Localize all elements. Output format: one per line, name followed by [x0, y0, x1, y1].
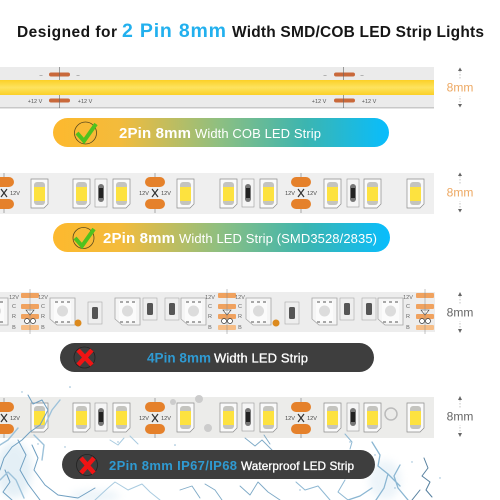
title	[17, 20, 484, 42]
pill: COB LED strip: Width COB LED Strip	[195, 126, 321, 141]
pill: 4 pin strip	[60, 343, 374, 372]
dimension: 8mm strip 1	[445, 68, 475, 108]
title: Width SMD/COB LED Strip Lights	[232, 24, 484, 41]
pill: 4 pin strip: 4Pin 8mm	[147, 350, 211, 366]
pill: waterproof strip	[62, 450, 375, 479]
pill: waterproof strip: 2Pin 8mm IP67/IP68	[109, 458, 237, 473]
water splash	[0, 386, 441, 500]
strip: COB LED: +12 V	[312, 99, 327, 105]
strip: COB LED: +12 V	[362, 99, 377, 105]
strip: COB LED: –	[39, 73, 43, 79]
pill: waterproof strip: Waterproof LED Strip	[241, 459, 354, 473]
strip: COB LED: –	[360, 73, 364, 79]
strip: COB LED: –	[76, 73, 80, 79]
icon: red cross	[74, 347, 95, 368]
pill: SMD LED strip	[53, 223, 390, 252]
strip: SMD LED	[0, 173, 434, 214]
strip: 4 pin RGB	[0, 289, 435, 334]
pill: SMD LED strip: Width LED Strip (SMD3528/2835)	[179, 231, 377, 246]
icon: check	[74, 122, 96, 144]
pill: COB LED strip	[53, 118, 389, 147]
pill: COB LED strip: 2Pin 8mm	[119, 125, 191, 142]
strip: COB LED: +12 V	[78, 99, 93, 105]
strip: COB LED	[0, 67, 434, 108]
icon: check	[73, 228, 94, 248]
pill: 4 pin strip: Width LED Strip	[214, 350, 308, 366]
dimension: 8mm strip 3	[443, 292, 477, 333]
title: 2 Pin 8mm	[122, 20, 226, 42]
dimension: 8mm strip 1: 8mm	[447, 80, 473, 94]
dimension: 8mm strip 2	[445, 172, 475, 212]
strip: COB LED: –	[323, 73, 327, 79]
dimension: 8mm strip 4: 8mm	[447, 410, 473, 424]
strip: COB LED: +12 V	[28, 99, 43, 105]
icon: red cross	[76, 454, 98, 476]
dimension: 8mm strip 4	[443, 396, 477, 437]
title: Designed for	[17, 24, 117, 41]
dimension: 8mm strip 3: 8mm	[447, 306, 473, 320]
strip: waterproof	[0, 395, 434, 438]
dimension: 8mm strip 2: 8mm	[447, 186, 473, 200]
pill: SMD LED strip: 2Pin 8mm	[103, 230, 175, 247]
